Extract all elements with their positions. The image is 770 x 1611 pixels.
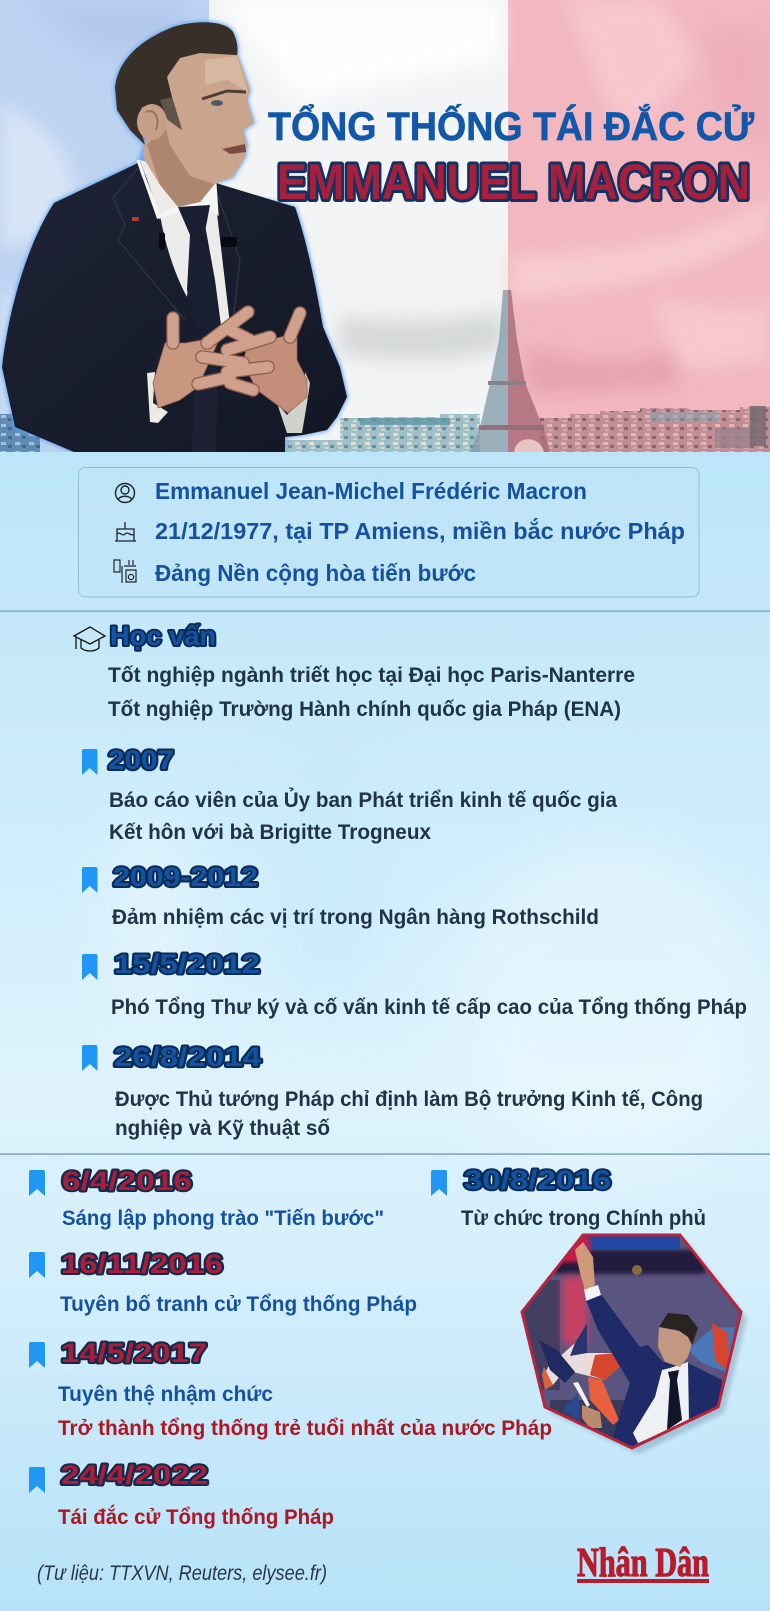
neck and face [143,53,254,207]
full name: Emmanuel Jean-Michel Frédéric Macron [155,478,587,504]
source note: (Tư liệu: TTXVN, Reuters, elysee.fr) [37,1562,327,1585]
title [268,102,755,210]
cuff and hand [584,1285,601,1301]
event text: Tuyên bố tranh cử Tổng thống Pháp [60,1292,417,1316]
event text: Phó Tổng Thư ký và cố vấn kinh tế cấp cao của Tổng thống Pháp [111,995,747,1019]
timeline: 16/11/2016 [29,1249,417,1316]
icon: bookmark [29,1467,45,1493]
icon: bookmark [82,1045,98,1071]
icon: bookmark [82,954,98,980]
icon: bookmark [29,1252,45,1278]
event text: Tái đắc cử Tổng thống Pháp [58,1504,334,1529]
timeline: 24/4/2022 [29,1460,334,1529]
crowd flags [539,1323,735,1428]
lapels [113,168,240,330]
eye and brow [202,91,246,106]
Paris skyline [0,406,770,452]
mouth [222,144,246,154]
event text: Được Thủ tướng Pháp chỉ định làm Bộ trưởng Kinh tế, Công [115,1087,703,1111]
suit [2,163,347,452]
date: 2009-2012 [113,862,258,892]
raised arm and suit [585,1293,722,1450]
event text: nghiệp và Kỹ thuật số [115,1116,330,1140]
icon: birthday cake [115,522,136,541]
political party: Đảng Nền cộng hòa tiến bước [155,560,476,586]
icon: bookmark [82,749,98,775]
event text: Từ chức trong Chính phủ [461,1206,706,1230]
event text: Kết hôn với bà Brigitte Trogneux [109,820,431,844]
logo: Nhân Dân: Nhân Dân [577,1539,709,1585]
panel: personal info [78,468,699,597]
French flag background [0,0,770,452]
date: 24/4/2022 [61,1460,208,1490]
icon: bookmark [29,1342,45,1368]
date: 14/5/2017 [61,1338,207,1368]
hexagonal photo: Macron waving [520,1233,747,1454]
event text: Báo cáo viên của Ủy ban Phát triển kinh tế quốc gia [109,787,618,812]
event text: Tuyên thệ nhậm chức [58,1382,273,1406]
icon: bookmark [29,1170,45,1196]
timeline: 14/5/2017 [29,1338,552,1440]
portrait glow [2,22,347,452]
photo shadow [528,1241,747,1454]
date: 30/8/2016 [464,1165,611,1195]
icon: bookmark [431,1170,447,1196]
event text: Sáng lập phong trào "Tiến bước" [62,1206,384,1230]
section: education [74,621,635,721]
portrait: Emmanuel Macron [2,22,347,452]
pin and microphones [132,217,237,250]
page background [0,452,770,1611]
tie [178,205,210,292]
photo border [522,1235,741,1448]
date: 2007 [108,745,174,775]
shirt [633,1362,689,1443]
date: 16/11/2016 [61,1249,223,1279]
timeline: 15/5/2012 [82,949,747,1019]
clasped hands [153,312,307,413]
event text: Đảm nhiệm các vị trí trong Ngân hàng Rothschild [112,905,599,929]
birth date and place: 21/12/1977, tại TP Amiens, miền bắc nước Pháp [155,517,685,544]
timeline: 2009-2012 [82,862,599,929]
Eiffel Tower [470,290,550,452]
icon: party podium [114,560,136,583]
ear [137,104,167,140]
tie [667,1370,682,1430]
collar [138,160,217,217]
shirt [140,160,231,333]
icon: person [116,484,134,502]
header banner [0,0,770,452]
education line 1: Tốt nghiệp ngành triết học tại Đại học Paris-Nanterre [108,663,635,687]
timeline: 6/4/2016 [29,1166,384,1230]
photo content [520,1233,742,1450]
icon: graduation cap [74,627,105,651]
head [658,1327,692,1367]
timeline: 26/8/2014 [82,1042,703,1140]
date: 15/5/2012 [114,949,260,979]
date: 6/4/2016 [62,1166,192,1196]
icon: bookmark [82,867,98,893]
timeline: 2007 [82,745,618,844]
heading: education: Học vấn [110,621,216,651]
date: 26/8/2014 [114,1042,261,1072]
cuffs [147,372,310,433]
event text: Trở thành tổng thống trẻ tuổi nhất của nước Pháp [58,1416,552,1440]
education line 2: Tốt nghiệp Trường Hành chính quốc gia Pháp (ENA) [108,697,621,721]
timeline: 30/8/2016 [431,1165,706,1230]
hair [115,22,238,145]
